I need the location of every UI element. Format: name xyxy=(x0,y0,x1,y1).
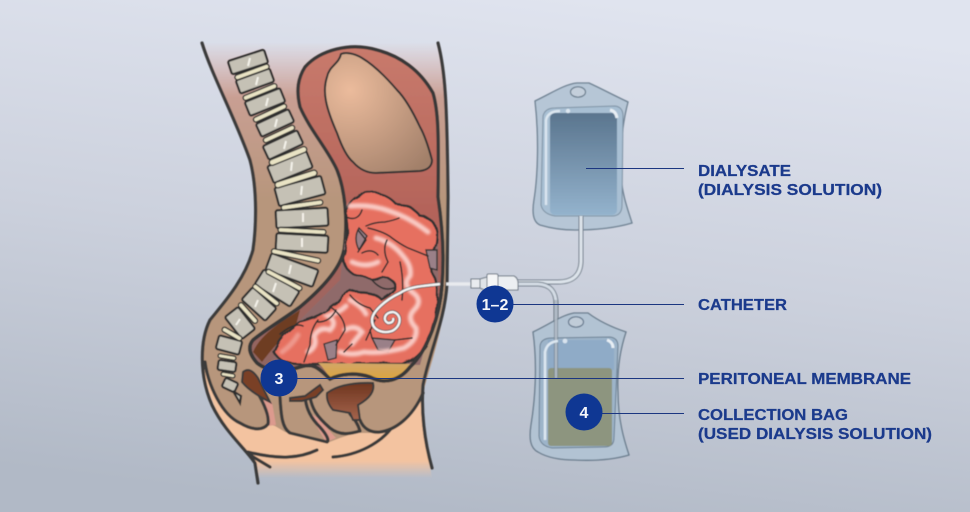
badge 4 xyxy=(566,394,602,430)
leader lines xyxy=(295,168,684,414)
back line xyxy=(202,43,258,483)
rectum and vaginal canal xyxy=(262,400,336,442)
intestines xyxy=(274,193,438,364)
peritoneal membrane fluid xyxy=(318,363,412,380)
label: collection bag: (USED DIALYSIS SOLUTION) xyxy=(698,426,932,443)
upper tube xyxy=(510,216,581,282)
solution xyxy=(550,113,617,215)
tube into bag xyxy=(554,300,558,378)
badge 3 xyxy=(260,360,298,396)
inner pouch xyxy=(539,337,618,448)
front wall xyxy=(422,43,448,468)
inner pouch xyxy=(541,106,623,216)
highlights xyxy=(545,341,558,440)
lower torso peach skin xyxy=(203,340,432,482)
line in from abdomen xyxy=(446,282,472,286)
tubing xyxy=(446,216,581,376)
uterus lobe xyxy=(280,397,328,442)
label: collection bag xyxy=(698,407,932,443)
clean upper area xyxy=(548,340,614,370)
label: collection bag: COLLECTION BAG xyxy=(698,407,848,424)
used solution xyxy=(548,368,612,446)
highlights xyxy=(546,111,560,205)
peritoneal cavity xyxy=(250,47,443,381)
vertebra highlights xyxy=(236,58,303,325)
pelvic organs xyxy=(242,370,373,420)
bowel silhouette xyxy=(274,193,438,364)
badge 1-2: 1–2 xyxy=(482,297,508,314)
mauve gaps xyxy=(324,228,437,360)
badge 3: 3 xyxy=(275,371,284,388)
catheter in abdomen xyxy=(372,284,440,332)
label: dialysate: DIALYSATE xyxy=(698,163,791,180)
back tissue xyxy=(202,43,448,443)
pink highlights xyxy=(282,206,428,354)
label: dialysate: (DIALYSIS SOLUTION) xyxy=(698,182,882,199)
fold lines xyxy=(280,210,428,362)
body illustration xyxy=(202,43,448,483)
dialysate bag xyxy=(533,83,632,230)
label: catheter: CATHETER xyxy=(698,297,787,314)
body outlines xyxy=(202,43,448,483)
connector xyxy=(471,274,518,291)
skin folds xyxy=(248,430,390,467)
liver xyxy=(325,53,432,173)
cavity lower outline xyxy=(250,250,442,381)
dark back of cavity xyxy=(253,310,300,362)
mauve cavity backdrop xyxy=(270,240,438,365)
badge 4: 4 xyxy=(580,405,589,422)
hanger hole xyxy=(568,317,584,327)
hanger hole xyxy=(570,87,586,97)
label: peritoneal membrane: PERITONEAL MEMBRANE xyxy=(698,371,911,388)
intervertebral discs xyxy=(218,63,326,378)
label: dialysate xyxy=(698,163,882,199)
bag body xyxy=(530,313,629,460)
vertebrae xyxy=(216,49,328,403)
collection bag xyxy=(530,300,629,460)
bag body xyxy=(533,83,632,230)
badge 1-2 xyxy=(476,286,514,322)
lower tube xyxy=(510,284,556,376)
spine xyxy=(216,49,328,403)
sacral tissue edge xyxy=(205,362,268,429)
bladder lobe xyxy=(310,397,360,434)
right lobe xyxy=(360,393,423,432)
